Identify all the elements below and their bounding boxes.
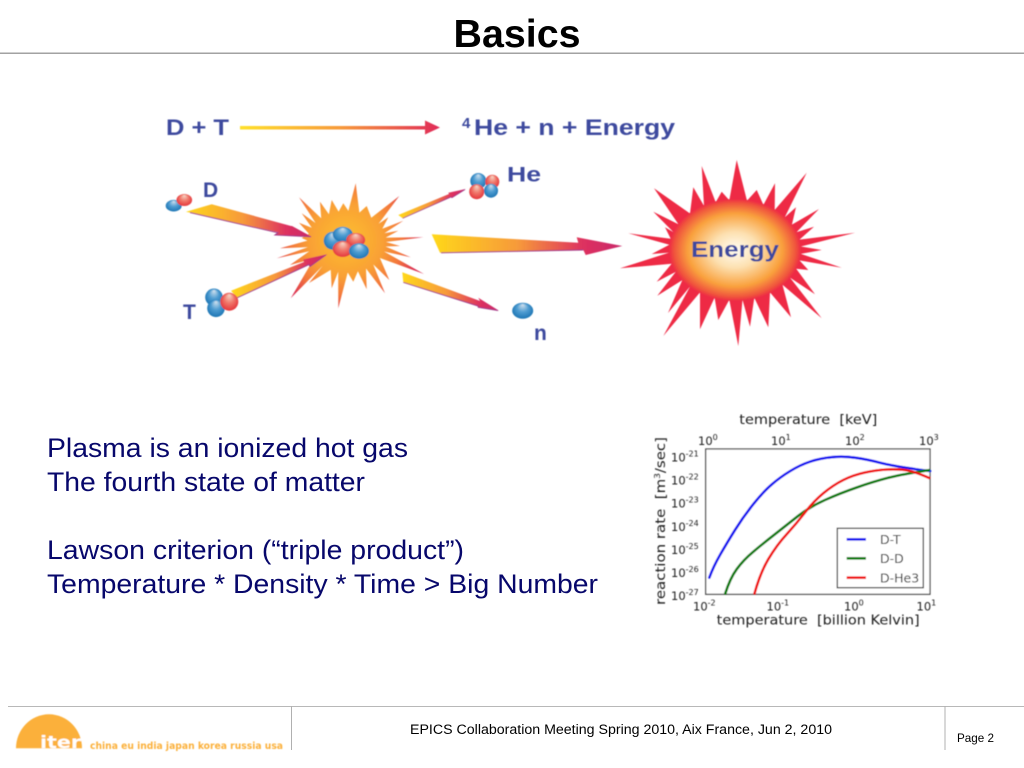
- axis ticks: top: 0: [713, 433, 718, 442]
- text block: Lawson criterion: Lawson criterion (“triple product”): [47, 535, 464, 565]
- axis ticks: bottom: [693, 598, 936, 614]
- axis ticks: top: 10: [919, 434, 934, 448]
- chart: reaction rate vs temperature: [653, 412, 939, 628]
- text block: plasma: Plasma is an ionized hot gas: [47, 433, 408, 463]
- axis ticks: bottom: 1: [931, 598, 936, 608]
- large burst: energy: [620, 160, 855, 346]
- axis ticks: bottom: 0: [859, 598, 864, 608]
- axis ticks: top: 10: [845, 434, 860, 448]
- text block: plasma: [47, 433, 408, 497]
- axis title: bottom: temperature [billion Kelvin]: [717, 612, 920, 628]
- atom: tritium: [205, 288, 238, 317]
- atom: deuterium: [166, 194, 192, 212]
- logo: ITER: [16, 714, 283, 753]
- axis ticks: left: 10: [671, 520, 686, 534]
- chart legend: D-T: [880, 532, 901, 547]
- curve: D-He3: [754, 469, 930, 594]
- chart legend: D-He3: [880, 570, 919, 586]
- curve: D-T: [709, 457, 930, 578]
- chart legend: [837, 528, 923, 588]
- axis ticks: left: 10: [671, 566, 686, 580]
- axis ticks: bottom: -2: [708, 598, 716, 608]
- axis ticks: bottom: 10: [693, 600, 708, 614]
- arrow: to He: [398, 189, 466, 218]
- axis title: left: reaction rate [m: [653, 491, 669, 605]
- axis ticks: left: 10: [671, 543, 686, 557]
- axis ticks: top: 10: [771, 434, 786, 448]
- chart legend: D-D: [880, 551, 904, 566]
- atom: colliding nucleus: [324, 227, 369, 259]
- equation: products: He + n + Energy: [474, 115, 676, 140]
- axis ticks: left: 10: [671, 450, 686, 464]
- axis title: top: temperature [keV]: [739, 412, 877, 428]
- axis ticks: top: [698, 433, 939, 448]
- arrow: reaction direction: [240, 120, 440, 134]
- title: Basics: [454, 13, 580, 56]
- axis ticks: left: -22: [686, 472, 699, 482]
- axis ticks: left: -24: [686, 519, 699, 528]
- axis ticks: left: 10: [671, 474, 686, 488]
- axis ticks: left: -21: [686, 450, 699, 458]
- axis ticks: left: -26: [686, 565, 699, 574]
- axis ticks: left: 10: [671, 589, 686, 603]
- axis ticks: left: -25: [686, 542, 699, 551]
- arrow: to energy: [432, 234, 622, 255]
- atom: helium: [469, 173, 499, 199]
- arrow: to neutron: [402, 272, 499, 311]
- label: T: T: [183, 301, 196, 324]
- axis ticks: bottom: 10: [916, 600, 931, 614]
- fusion reaction diagram: [166, 115, 855, 346]
- axis ticks: top: 10: [698, 434, 713, 448]
- small burst: fusion event: [277, 183, 424, 308]
- axis title: left: 3: [653, 473, 662, 479]
- label: D: D: [203, 179, 218, 202]
- atom: neutron: [512, 303, 533, 319]
- axis ticks: left: [671, 450, 699, 603]
- text block: Lawson criterion: Temperature * Density * Time > Big Number: [47, 569, 598, 599]
- footer: page number: Page 2: [957, 731, 994, 745]
- axis ticks: left: 10: [671, 497, 686, 511]
- axis ticks: bottom: -1: [781, 598, 789, 608]
- arrow: T into burst: [231, 254, 327, 298]
- label: n: n: [534, 322, 547, 345]
- logo: ITER: iter: [40, 733, 82, 753]
- label: Energy: Energy: [691, 237, 780, 262]
- axis ticks: top: 2: [860, 433, 865, 442]
- footer: meeting name: EPICS Collaboration Meeting Spring 2010, Aix France, Jun 2, 2010: [410, 722, 832, 738]
- text block: plasma: The fourth state of matter: [47, 467, 365, 497]
- curve: D-D: [725, 470, 930, 594]
- axis ticks: bottom: 10: [766, 600, 781, 614]
- text block: Lawson criterion: [47, 535, 598, 599]
- equation: D + T: D + T: [166, 115, 230, 140]
- arrow: D into burst: [186, 204, 312, 237]
- equation: products: 4: [462, 115, 471, 132]
- axis ticks: top: 1: [786, 433, 791, 442]
- chart plot frame: [706, 449, 930, 594]
- axis title: left: /sec]: [653, 437, 669, 473]
- axis ticks: bottom: 10: [844, 600, 859, 614]
- logo: ITER: china eu india japan korea russia usa: [90, 741, 283, 752]
- axis ticks: left: -23: [686, 496, 699, 505]
- axis ticks: left: -27: [686, 588, 699, 597]
- axis ticks: top: 3: [934, 433, 939, 442]
- label: He: He: [507, 164, 541, 186]
